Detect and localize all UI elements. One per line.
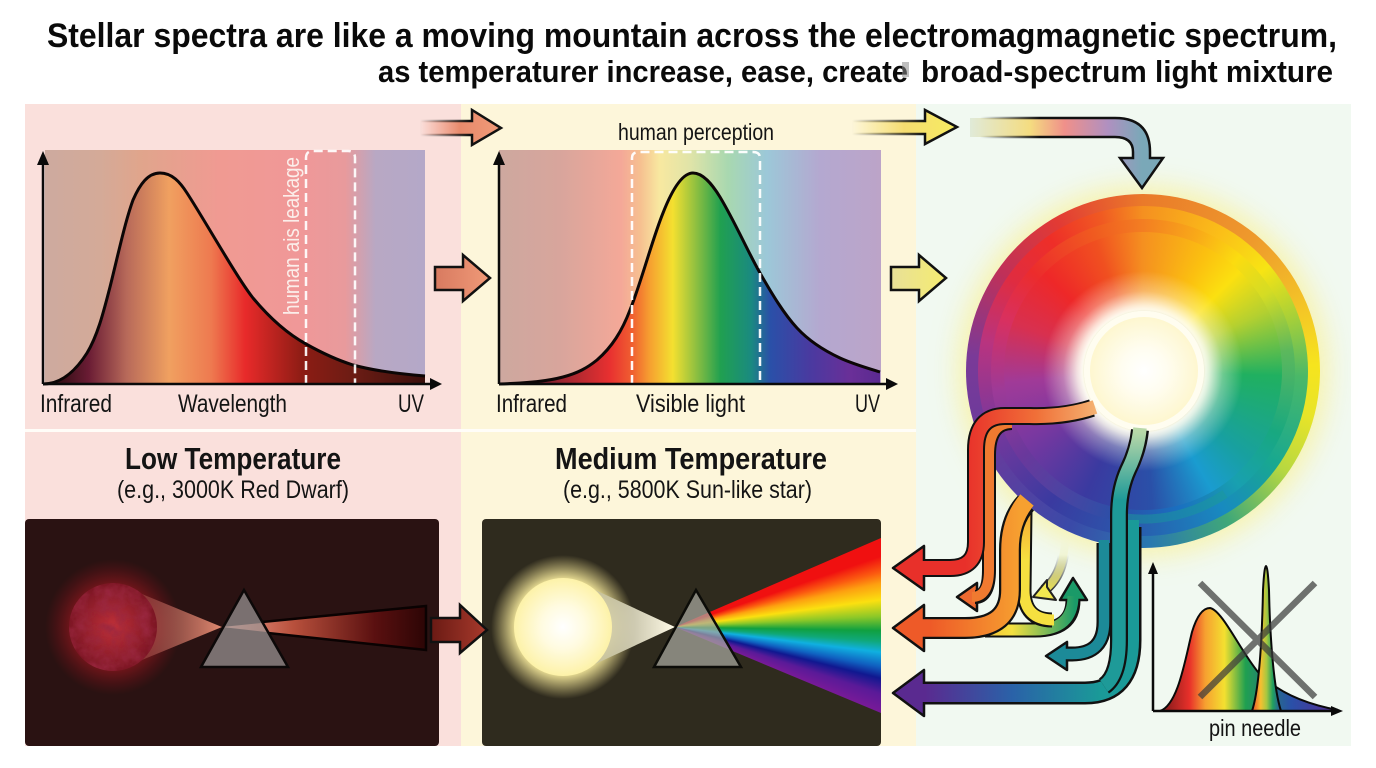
axis labels: Infrared (496, 390, 567, 418)
incoming beam (125, 587, 222, 667)
teal ring arc in wheel (1125, 494, 1225, 519)
title: broad-spectrum light mixture (921, 54, 1333, 89)
plot background (499, 150, 881, 384)
panel: high temperature background (916, 104, 1351, 746)
arrow: violet band (893, 520, 1130, 716)
title (47, 17, 1337, 89)
panel: low temperature background (25, 104, 461, 746)
dim outgoing beam (222, 606, 426, 650)
arrow: yellow to green upward band (985, 578, 1087, 630)
chart: medium temperature spectrum (493, 150, 898, 418)
axes (43, 165, 430, 384)
prism (654, 590, 741, 667)
arrow: bent into colour wheel (970, 118, 1163, 188)
plot background (45, 150, 425, 384)
wheel inner ring (991, 219, 1295, 523)
arrow: small teal band (1046, 540, 1104, 670)
text: human perception: human perception (618, 119, 774, 145)
rainbow fan (677, 538, 881, 713)
arrow: medium to wheel (891, 255, 946, 301)
heading: medium temperature (555, 441, 827, 504)
axes (499, 165, 886, 384)
mini chart label: pin needle (1209, 715, 1301, 741)
wheel outer ring (966, 194, 1320, 548)
heading: low temperature: (e.g., 3000K Red Dwarf) (117, 476, 349, 504)
chart: low temperature spectrum (37, 150, 442, 418)
wheel core (1004, 232, 1282, 510)
arrow: small orange band (957, 423, 1012, 611)
blackbody curve (499, 173, 880, 384)
broad bell (1160, 608, 1338, 711)
arrow: low to medium chart (435, 255, 490, 301)
arrow: orange band (893, 500, 1027, 651)
incoming beam (580, 583, 675, 671)
central white star (1084, 311, 1204, 431)
dashed visible band (632, 152, 760, 384)
arrow: yellow looping band (1024, 506, 1054, 620)
arrow: red dwarf to sun-like star (431, 605, 487, 653)
heading: low temperature: Low Temperature (125, 441, 341, 476)
chart: medium temperature spectrum: UV (855, 390, 880, 418)
heading: medium temperature: Medium Temperature (555, 441, 827, 476)
heading: low temperature (117, 441, 349, 504)
rotated label: human ais leakage (279, 157, 304, 315)
mini axes (1153, 572, 1332, 711)
panel: sun-like star dark box (482, 519, 881, 746)
chart: low temperature spectrum: Wavelength (178, 390, 287, 418)
output arrows from wheel (893, 407, 1225, 716)
red star (69, 583, 157, 671)
arrow: faded yellow (1033, 535, 1065, 600)
chart: medium temperature spectrum: Visible light (636, 390, 745, 418)
axis labels: Infrared (40, 390, 112, 418)
arrow: top middle fading (852, 110, 957, 144)
panel: medium temperature background (461, 104, 916, 746)
sun-like star prism scene (491, 555, 741, 699)
star (514, 578, 612, 676)
needle peak (1252, 566, 1281, 711)
arrow: top left fading (420, 110, 501, 145)
red dwarf prism scene (45, 559, 426, 695)
red star glow (45, 559, 181, 695)
color wheel (966, 194, 1320, 548)
panel divider (25, 429, 916, 432)
prism (201, 590, 288, 667)
star surface texture (69, 583, 157, 671)
blackbody curve (43, 173, 425, 384)
arrow: red band (893, 407, 1095, 590)
dashed visible band (306, 151, 355, 384)
star glow (491, 555, 635, 699)
arrow: teal band from star (1104, 428, 1140, 686)
white glow around star (966, 194, 1320, 548)
heading: medium temperature: (e.g., 5800K Sun-like star) (563, 476, 812, 504)
title: as temperaturer increase, ease, create (378, 54, 908, 89)
mini chart: pin needle spectrum (1148, 562, 1343, 741)
wheel middle ring (978, 206, 1308, 536)
panel: red dwarf dark box (25, 519, 439, 746)
chart: low temperature spectrum: UV (398, 390, 424, 418)
crossed-out mark (1200, 583, 1315, 697)
